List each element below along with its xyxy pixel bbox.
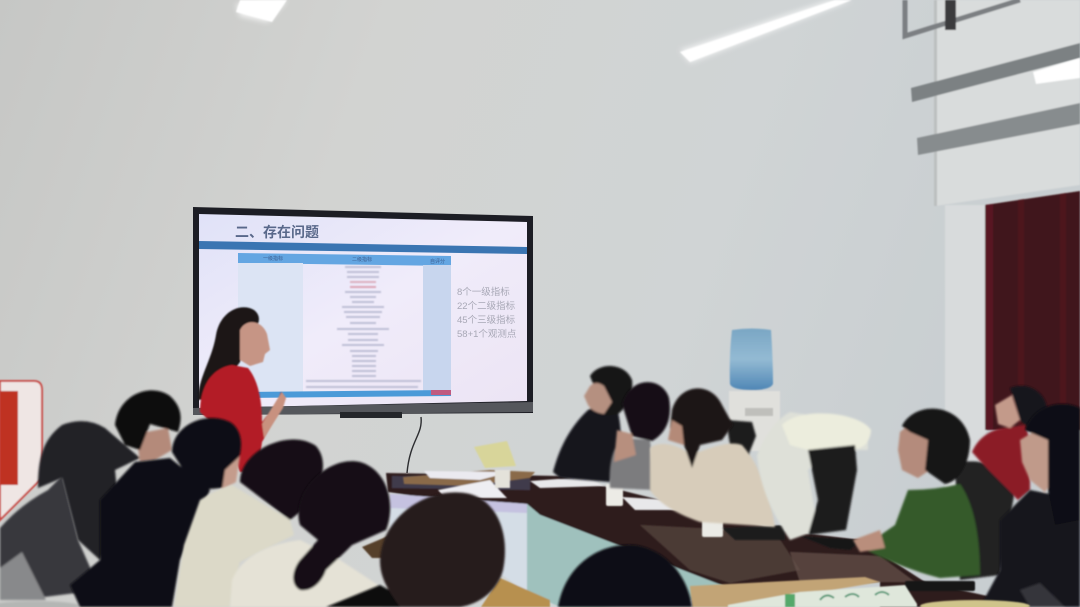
conference table xyxy=(362,473,1005,607)
water cooler xyxy=(729,328,780,451)
slide side notes: 22个二级指标 xyxy=(457,300,516,312)
audience: woman with ponytail xyxy=(230,461,390,607)
black leather chair behind xyxy=(726,420,756,456)
table papers and cups xyxy=(403,441,975,591)
slide side notes: 58+1个观测点 xyxy=(457,329,517,340)
slide side notes: 45个三级指标 xyxy=(457,314,516,326)
jacket on chair xyxy=(757,412,871,540)
slide side notes: 8个一级指标 xyxy=(457,286,510,298)
audience: man with dark hair xyxy=(38,390,181,560)
slide table: 自评分 xyxy=(430,258,445,265)
slide side notes xyxy=(457,286,517,340)
audience: woman in black coat xyxy=(70,418,241,607)
audience: woman in cream puffer xyxy=(174,440,323,607)
audience: woman in foreground xyxy=(326,492,505,607)
woman in beige sweater xyxy=(650,388,775,527)
wall sign xyxy=(0,381,42,520)
side wall and door xyxy=(945,191,1080,535)
woman in green sweater xyxy=(853,409,1015,580)
woman in black, far right xyxy=(980,404,1080,607)
ceiling lights xyxy=(236,0,1080,84)
slide table: 一级指标 xyxy=(263,255,283,262)
speaker in red xyxy=(198,307,286,472)
slide table xyxy=(238,253,451,398)
ceiling beam and pipes xyxy=(905,0,1080,206)
woman in red sweater xyxy=(972,386,1047,500)
woman with bob hair xyxy=(610,382,670,490)
presentation screen xyxy=(193,207,533,418)
slide blue band xyxy=(199,241,527,254)
cable xyxy=(407,417,421,473)
slide table: 二级指标 xyxy=(352,256,372,263)
cardboard box and green-white bag xyxy=(690,577,1030,607)
slide title: 二、存在问题 xyxy=(235,224,319,240)
audience: head at bottom xyxy=(558,545,692,607)
audience: front chair xyxy=(0,476,100,607)
man in dark jacket, right xyxy=(553,366,632,482)
